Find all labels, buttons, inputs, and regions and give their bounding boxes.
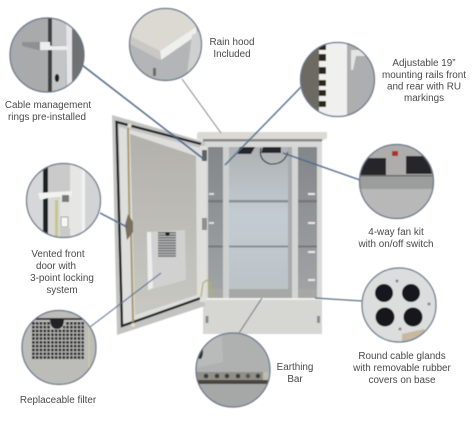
door: [112, 115, 205, 335]
fan units: [237, 147, 255, 154]
label: mounting rails: and rear with RU: [387, 82, 461, 92]
door inner panel: [130, 134, 197, 315]
circle: rain hood: [129, 8, 203, 82]
label: fan kit: with on/off switch: [357, 239, 434, 250]
circle: cable glands: [361, 267, 437, 343]
label: cable management: Cable management: [5, 100, 91, 111]
cabinet interior: [208, 147, 317, 298]
label: rain hood: Included: [213, 49, 251, 60]
side brackets: [308, 193, 315, 195]
circle: earthing bar: [195, 332, 271, 408]
line: rain hood: [182, 79, 221, 133]
door right frame: [200, 146, 206, 302]
label: cable glands: Round cable glands: [358, 351, 446, 362]
label: locking system: system: [46, 285, 78, 296]
line: cable rings: [82, 65, 205, 160]
leader lines: [82, 65, 362, 333]
line: glands: [315, 298, 362, 301]
line: fan: [283, 153, 360, 180]
label: mounting rails: markings: [404, 93, 444, 104]
circle: fan kit: [358, 144, 435, 221]
filter grille: [158, 232, 176, 257]
door latch: [125, 214, 133, 240]
line: locking: [100, 213, 127, 227]
cabinet floor: [208, 289, 317, 298]
power cable: [260, 148, 297, 190]
door hinges: [202, 150, 207, 161]
rain hood: [197, 132, 327, 141]
circle: mounting rails: [300, 42, 376, 117]
label: mounting rails: mounting rails front: [382, 70, 466, 81]
line: rails: [225, 87, 301, 165]
label: cable glands: with removable rubber: [352, 363, 452, 374]
door gasket: [116, 122, 201, 326]
cabinet: [112, 115, 327, 335]
label: cable management: rings pre-installed: [8, 112, 86, 123]
circle: cable management rings: [10, 18, 84, 92]
label: replaceable filter: Replaceable filter: [20, 395, 97, 406]
door locking rod: [128, 128, 133, 322]
label: fan kit: 4-way fan kit: [368, 227, 424, 238]
shelves: [208, 200, 223, 202]
label: earthing bar: Earthing: [277, 362, 313, 373]
label: locking system: 3-point locking: [30, 273, 94, 284]
cabinet body: [203, 139, 322, 334]
label: earthing bar: Bar: [287, 374, 303, 385]
label: cable glands: covers on base: [369, 375, 436, 386]
cabinet base: [203, 298, 322, 334]
label: mounting rails: Adjustable 19”: [392, 58, 456, 69]
circle: locking system: [26, 163, 102, 239]
door filter: [147, 230, 186, 290]
line: filter: [90, 273, 161, 327]
label: rain hood: Rain hood: [209, 37, 255, 48]
mounting rails: [223, 147, 229, 298]
label: locking system: Vented front: [31, 249, 85, 260]
label: locking system: door with: [36, 261, 76, 272]
circle: replaceable filter: [21, 310, 97, 386]
line: earthing: [239, 298, 262, 333]
